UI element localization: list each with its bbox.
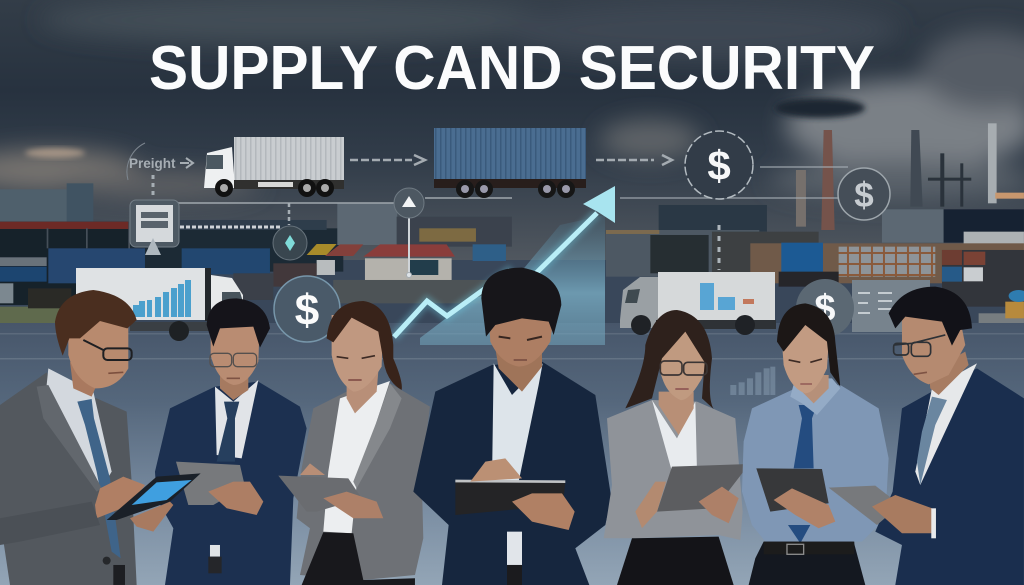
person 6: blue shirt	[742, 303, 889, 585]
factory buildings	[606, 205, 1024, 327]
freight label: Preight	[129, 156, 176, 171]
dollar node top: $	[707, 142, 731, 189]
industrial skyline right	[606, 123, 1024, 327]
industrial skyline left	[0, 183, 512, 325]
dollar node lower left: $	[295, 286, 319, 335]
dashboard icon node	[130, 200, 179, 255]
person 2: navy suit	[155, 298, 307, 585]
person 3: grey blazer	[278, 301, 430, 585]
white container truck	[204, 137, 344, 197]
people group right	[413, 268, 1024, 585]
dollar node lower left	[274, 276, 340, 342]
dollar node top	[685, 131, 753, 199]
dollar node right: $	[854, 176, 874, 215]
buildings left	[0, 183, 512, 325]
network connectors	[153, 167, 848, 278]
white truck with bar chart	[76, 268, 243, 341]
dollar node and grey document panel	[796, 279, 930, 337]
shield icon node	[273, 226, 307, 260]
first person's tablet	[107, 473, 201, 532]
grey truck with data	[620, 272, 776, 335]
faint background chart	[730, 367, 775, 395]
person 1: grey suit	[0, 290, 145, 585]
growth arrow	[394, 186, 615, 337]
title: SUPPLY CAND SECURITY	[149, 34, 875, 103]
blue container truck	[434, 128, 586, 198]
dollar node right	[838, 168, 890, 220]
people group left	[0, 290, 430, 585]
freight label	[127, 143, 193, 180]
person 4: central navy suit	[413, 268, 611, 585]
arrow: container to dollar	[596, 155, 672, 165]
stormy sky	[0, 0, 1024, 260]
translucent chart glow panel	[420, 215, 605, 345]
road and ground	[0, 323, 1024, 585]
smokestacks and towers	[796, 123, 1024, 230]
person 5: light grey blazer	[604, 310, 749, 585]
dollar node and grey document panel: $	[814, 288, 836, 330]
alert icon node	[394, 188, 424, 218]
person 7: navy suit	[829, 287, 1024, 585]
bar chart on truck	[133, 280, 191, 317]
arrow: truck to container	[350, 155, 425, 165]
